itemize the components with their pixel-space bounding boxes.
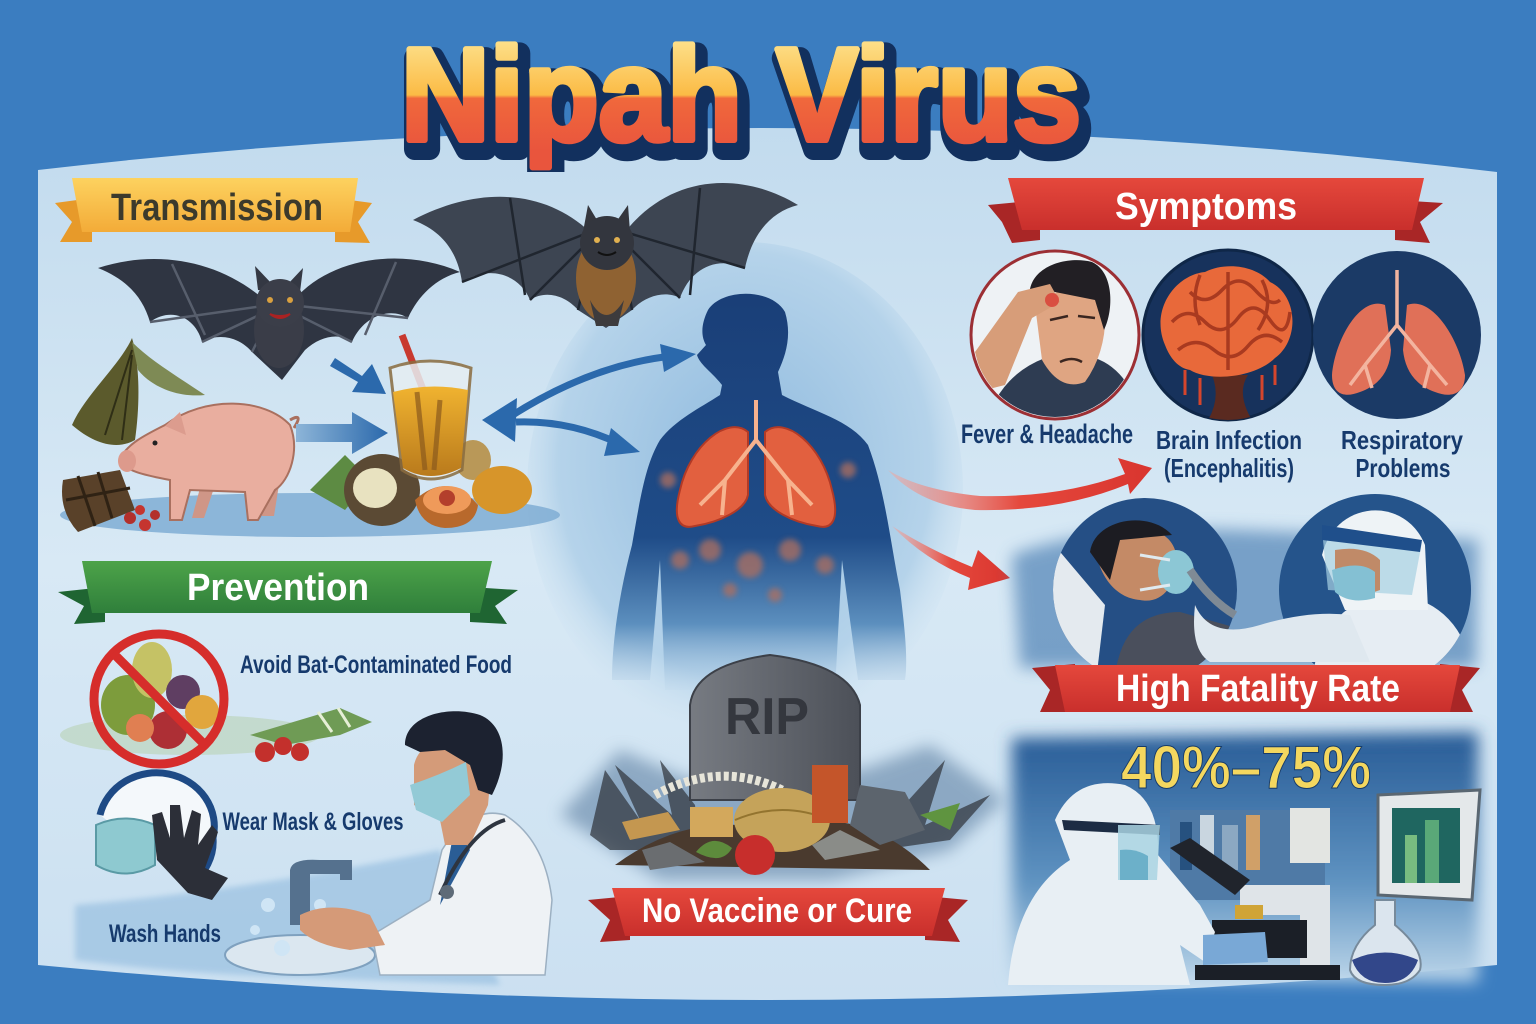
icon: scientist in protective suit bbox=[1008, 783, 1268, 985]
label: Respiratory: Respiratory bbox=[1341, 425, 1463, 455]
icon: microscope bbox=[1170, 838, 1340, 980]
banner: High Fatality Rate bbox=[1032, 664, 1480, 712]
title: Nipah Virus: Nipah Virus bbox=[401, 21, 1081, 168]
illustration: doctor washing hands bbox=[300, 711, 552, 975]
central oval glow bbox=[527, 242, 963, 738]
icon: computer monitor bbox=[1378, 790, 1480, 900]
gravestone: RIP: RIP bbox=[725, 688, 809, 746]
icon: bat top centre bbox=[413, 183, 798, 328]
icon: fruits under glass bbox=[310, 440, 532, 528]
label: Brain Infection: Brain Infection bbox=[1156, 425, 1302, 455]
statistic: 40%-75%: 40%–75% bbox=[1121, 734, 1371, 801]
title: Nipah Virus: Nipah Virus bbox=[406, 30, 1086, 177]
arrows: bat and pig to juice bbox=[296, 358, 388, 454]
icon: flask bbox=[1350, 900, 1421, 985]
icon: leaf bundle and berries bbox=[250, 708, 372, 762]
rubble shadow bbox=[560, 745, 1005, 880]
icon: leaves and branch bbox=[72, 338, 205, 445]
rubble pile with food bbox=[615, 765, 960, 875]
text: Wash Hands: Wash Hands bbox=[109, 920, 221, 948]
label: Problems: Problems bbox=[1356, 453, 1450, 483]
text: Avoid Bat-Contaminated Food: Avoid Bat-Contaminated Food bbox=[240, 651, 512, 679]
gravestone: RIP bbox=[690, 655, 860, 800]
icon: pig bbox=[118, 404, 298, 520]
panel: laboratory bbox=[1008, 732, 1480, 985]
banner: Prevention: Prevention bbox=[187, 567, 369, 609]
illustration: health worker in protective suit bbox=[1279, 494, 1471, 665]
arrows: two-way juice to human bbox=[482, 344, 696, 456]
icon: no contaminated food bbox=[60, 634, 320, 764]
text: Wear Mask & Gloves: Wear Mask & Gloves bbox=[222, 808, 404, 836]
ground shadow: transmission bbox=[60, 493, 560, 537]
illustration: patient blanket and oxygen tube bbox=[1190, 570, 1370, 662]
banner: Transmission: Transmission bbox=[111, 187, 323, 229]
banner: Transmission bbox=[55, 178, 372, 243]
label: Encephalitis: (Encephalitis) bbox=[1164, 453, 1294, 483]
symptom: fever and headache bbox=[961, 251, 1145, 449]
label: Fever & Headache: Fever & Headache bbox=[961, 419, 1133, 449]
arrows: human to symptoms bbox=[888, 458, 1152, 590]
banner: Symptoms bbox=[988, 178, 1443, 243]
banner: Prevention bbox=[58, 561, 518, 624]
human silhouette bbox=[612, 294, 906, 690]
icon: sink and tap with water bbox=[225, 860, 375, 975]
icon: mask and gloves bbox=[96, 773, 228, 900]
backdrop: wash basin area bbox=[75, 850, 500, 985]
illustration: ventilated patient bbox=[1053, 498, 1237, 665]
backdrop: patient scene bbox=[1012, 529, 1478, 668]
icon: bat left bbox=[98, 259, 460, 380]
dark debris spikes bbox=[590, 760, 990, 850]
symptom: respiratory problems bbox=[1313, 251, 1481, 483]
banner: No Vaccine or Cure: No Vaccine or Cure bbox=[642, 892, 912, 930]
icon: basket with fallen berries bbox=[62, 470, 160, 532]
banner: Symptoms: Symptoms bbox=[1115, 186, 1297, 228]
lungs bbox=[660, 400, 856, 602]
icon: juice glass with straw bbox=[390, 335, 471, 479]
banner: High Fatality Rate: High Fatality Rate bbox=[1116, 668, 1400, 710]
lab shelves bbox=[1170, 808, 1330, 900]
symptom: brain infection bbox=[1143, 250, 1313, 483]
banner: No Vaccine or Cure bbox=[588, 888, 968, 942]
